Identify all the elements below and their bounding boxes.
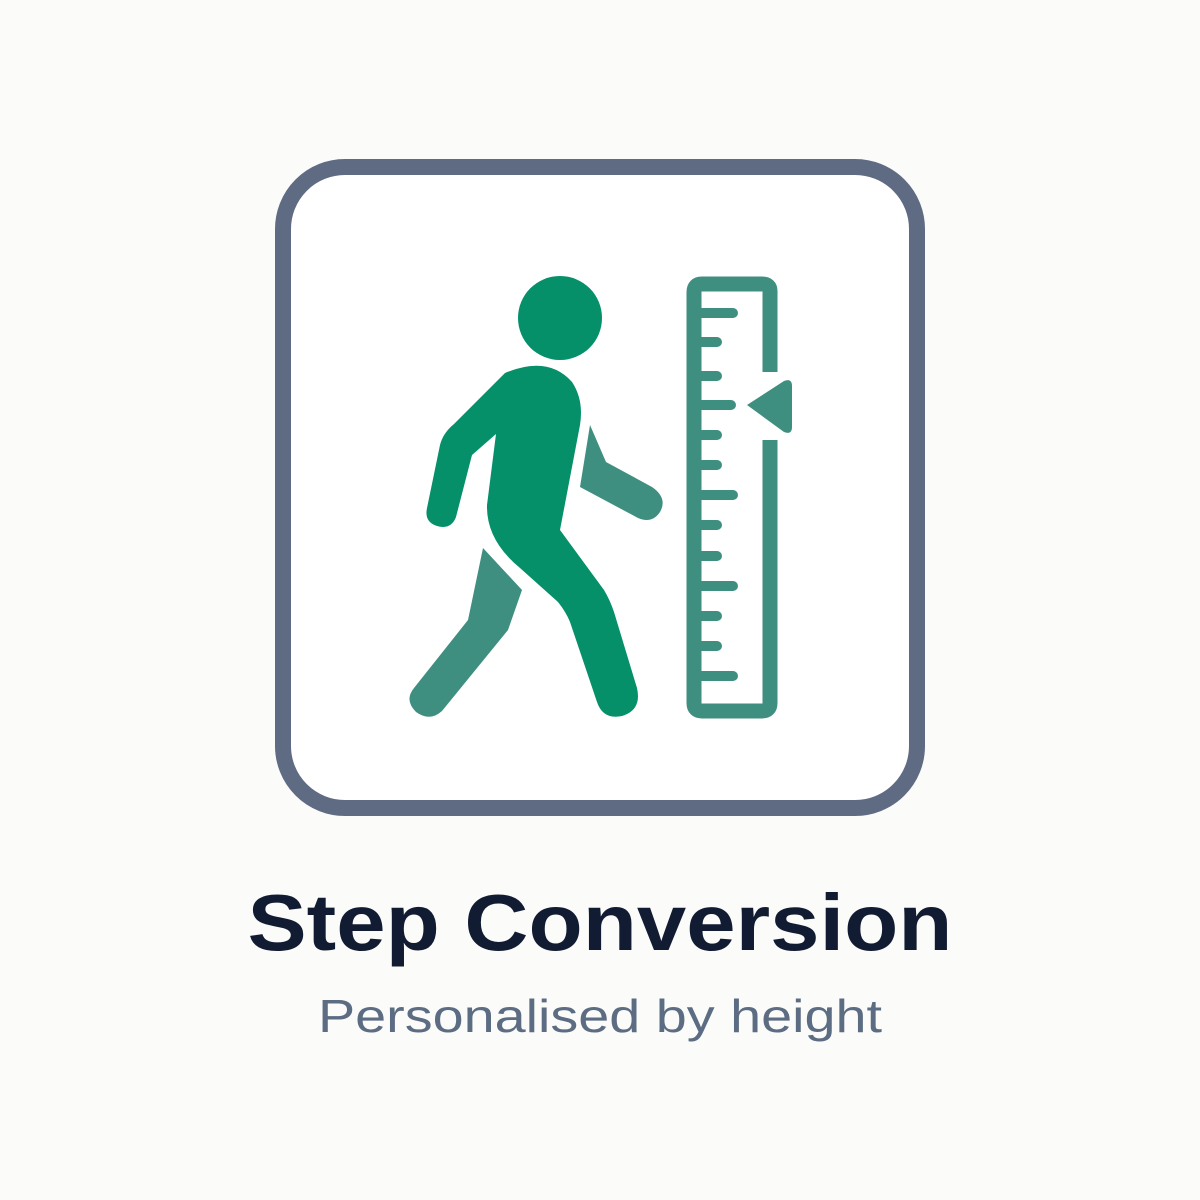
icon: height ruler <box>694 284 792 711</box>
back arm <box>580 425 663 520</box>
subtitle: Personalised by height <box>318 990 882 1042</box>
ruler ticks <box>700 313 733 676</box>
icon: walking person <box>409 276 663 717</box>
torso, front arm and front leg <box>426 366 638 717</box>
title: Step Conversion <box>248 878 952 967</box>
ruler outline <box>694 284 770 711</box>
back leg <box>409 548 522 717</box>
height marker triangle <box>747 380 792 433</box>
icon frame: rounded square <box>283 167 917 808</box>
head <box>518 276 602 360</box>
